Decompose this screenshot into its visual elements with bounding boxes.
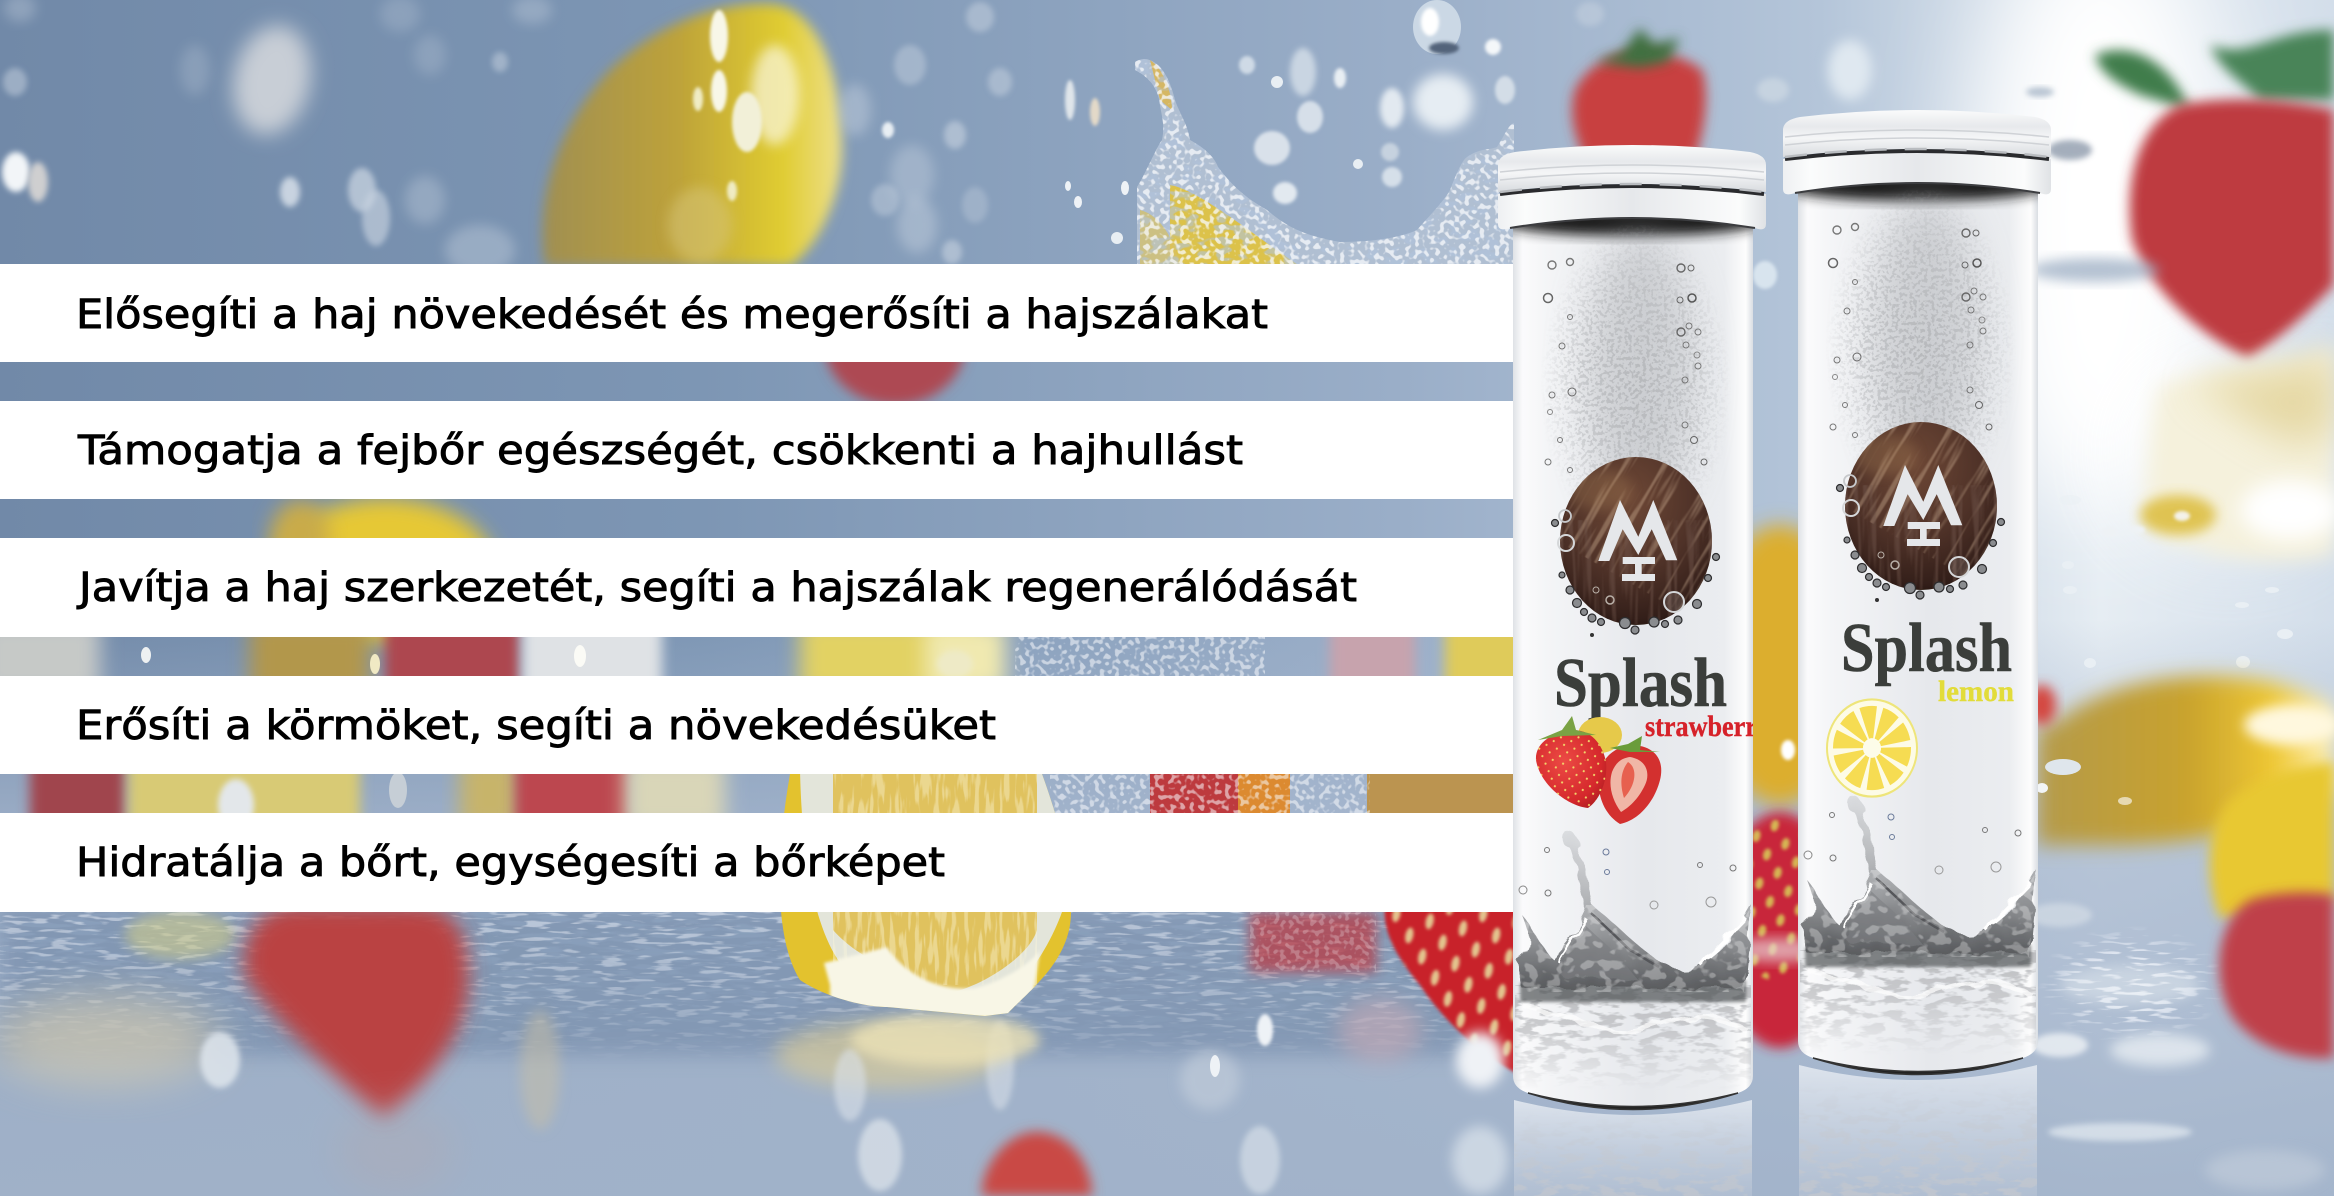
bottle reflection: strawberry [1514, 1100, 1752, 1196]
background: blurred strawberry behind bottles [1572, 28, 1706, 170]
background: droplets right side [2059, 495, 2293, 668]
background: golden lemon right [2028, 676, 2334, 845]
text band 4 [0, 676, 1514, 774]
illustration: strawberries [1536, 716, 1661, 824]
background: water right side [2028, 903, 2325, 1190]
background: small blurred strawberry bottom [982, 1132, 1092, 1196]
background: fruits in gaps between the bands [0, 285, 1535, 831]
bottle reflection: lemon [1799, 1065, 2037, 1196]
background: blurred water droplets [2, 0, 1872, 275]
background: blurred strawberry bottom left [244, 905, 468, 1195]
background: fruit between the bottles [1710, 261, 1850, 1048]
background: water surface with ripples [0, 905, 1514, 1194]
label: lemon flavour: lemon [1938, 675, 2014, 708]
text band 2 [0, 401, 1514, 499]
background: big strawberry top right [2026, 30, 2334, 358]
background: strawberry lower right [2219, 893, 2334, 1058]
label: Splash wordmark lemon: Splash [1841, 610, 2012, 687]
text band 3: Javítja a haj szerkezetét, segíti a hajszálak regenerálódását [76, 565, 1357, 611]
text band 5 [0, 813, 1514, 912]
label: Splash wordmark strawberry: Splash [1554, 645, 1727, 722]
bottle: lemon [1757, 110, 2107, 1074]
label: strawberry flavour: strawberry [1645, 710, 1770, 743]
background: blurred lemon at top [543, 4, 842, 266]
background: lemon wedge on water [770, 770, 1080, 1066]
text band 1 [0, 264, 1514, 362]
text band 1: Elősegíti a haj növekedését és megerősíti a hajszálakat [76, 292, 1268, 338]
background: top splash of water [1130, 55, 1520, 267]
text band 3 [0, 538, 1514, 637]
background: pale lemon slice right [2102, 345, 2334, 560]
text band 5: Hidratálja a bőrt, egységesíti a bőrképet [76, 840, 945, 886]
background: strawberry beside the bottle [1250, 905, 1520, 1088]
illustration: lemon slice [1827, 699, 1917, 797]
background: yellow lemon lower right [2210, 762, 2334, 918]
text band 2: Támogatja a fejbőr egészségét, csökkenti a hajhullást [77, 428, 1243, 474]
bottle: strawberry [1498, 145, 1766, 1110]
text band 4: Erősíti a körmöket, segíti a növekedésüket [76, 703, 996, 749]
